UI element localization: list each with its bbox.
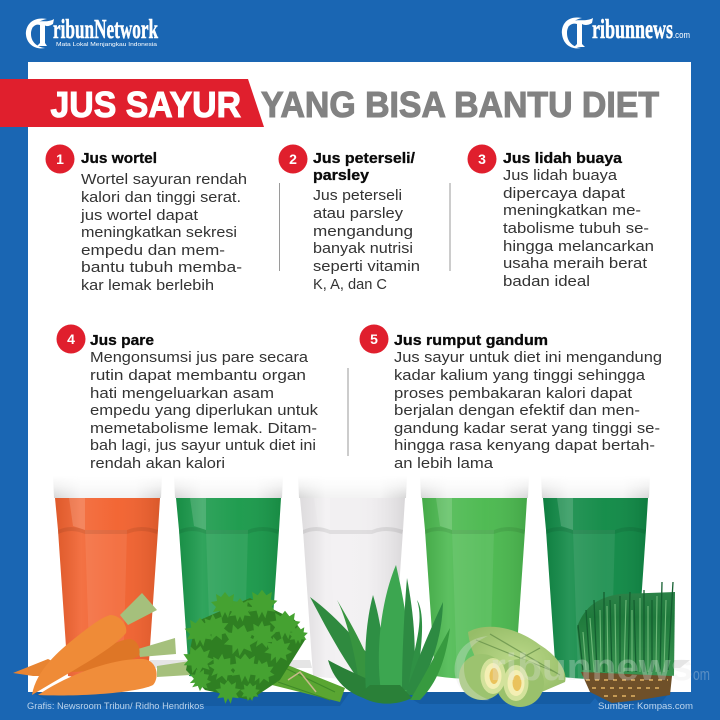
shelf shadow — [150, 660, 690, 668]
icon: aloe vera — [310, 565, 450, 704]
item 2: jus peterseli: Jus peterseli/ — [313, 150, 416, 167]
item 2: jus peterseli — [278, 144, 420, 293]
item 1: jus wortel: jus wortel dapat — [80, 207, 199, 224]
item 1: jus wortel: bantu tubuh memba- — [81, 259, 242, 276]
logo: Tribunnews.com — [562, 14, 690, 48]
title banner: JUS SAYUR — [50, 84, 241, 125]
item 5: jus rumput gandum — [360, 324, 662, 472]
item 2: jus peterseli: Jus peterseli — [313, 187, 402, 204]
item 4: jus pare: Jus pare — [90, 332, 154, 349]
icon: wheatgrass — [577, 582, 675, 703]
title banner — [0, 79, 659, 127]
item 5: jus rumput gandum: kadar kalium yang tinggi sehingga — [394, 367, 646, 384]
glass: bitter gourd juice — [420, 476, 529, 679]
item 2: jus peterseli: K, A, dan C — [313, 276, 387, 293]
icon: parsley — [180, 590, 345, 704]
glass: parsley juice — [174, 476, 283, 679]
logo: Tribun Network — [26, 14, 158, 48]
item 4: jus pare: hati mengeluarkan asam — [90, 385, 274, 402]
credit: source: Sumber: Kompas.com — [598, 701, 693, 712]
item 2: jus peterseli: mengandung — [313, 223, 413, 240]
glass: wheatgrass juice — [541, 476, 650, 679]
watermark — [455, 636, 710, 700]
item 3: jus lidah buaya — [468, 144, 654, 290]
item 3: jus lidah buaya: meningkatkan me- — [503, 202, 641, 219]
item 4: jus pare: empedu yang diperlukan untuk — [90, 402, 319, 419]
logo: Tribun Network: Mata Lokal Menjangkau Indonesia — [56, 42, 158, 48]
item 5: jus rumput gandum: gandung kadar serat yang tinggi se- — [394, 420, 660, 437]
item 1: jus wortel: Wortel sayuran rendah — [81, 171, 247, 188]
watermark: om — [693, 665, 710, 684]
item 3: jus lidah buaya: badan ideal — [503, 273, 590, 290]
item 3: jus lidah buaya: hingga melancarkan — [503, 238, 654, 255]
item 4: jus pare: Mengonsumsi jus pare secara — [90, 349, 309, 366]
shadow under vegetables — [30, 692, 670, 706]
icon: carrots — [13, 593, 190, 695]
item 1: jus wortel: kar lemak berlebih — [81, 277, 214, 294]
item 4: jus pare: 4 — [67, 331, 75, 347]
item 1: jus wortel: 1 — [56, 151, 64, 167]
item 4: jus pare: memetabolisme lemak. Ditam- — [90, 420, 317, 437]
icon: bitter gourd — [459, 627, 566, 707]
item 1: jus wortel: meningkatkan sekresi — [81, 224, 237, 241]
item 5: jus rumput gandum: hingga rasa kenyang dapat bertah- — [394, 437, 655, 454]
item 4: jus pare — [56, 324, 319, 472]
item 5: jus rumput gandum: berjalan dengan efektif dan men- — [394, 402, 640, 419]
item 5: jus rumput gandum: 5 — [370, 331, 378, 347]
item 2: jus peterseli: banyak nutrisi — [313, 240, 413, 257]
item 3: jus lidah buaya: usaha meraih berat — [503, 255, 648, 272]
item 4: jus pare: bah lagi, jus sayur untuk diet ini — [90, 437, 316, 454]
item 2: jus peterseli: parsley — [313, 167, 370, 184]
glass: aloe juice — [298, 476, 407, 679]
item 2: jus peterseli: atau parsley — [313, 205, 404, 222]
item 5: jus rumput gandum: Jus rumput gandum — [394, 332, 548, 349]
item 5: jus rumput gandum: Jus sayur untuk diet ini mengandung — [394, 349, 662, 366]
item 1: jus wortel: Jus wortel — [81, 150, 157, 167]
item 1: jus wortel: kalori dan tinggi serat. — [81, 189, 241, 206]
item 5: jus rumput gandum: an lebih lama — [394, 455, 494, 472]
item 1: jus wortel — [46, 144, 247, 294]
title banner: YANG BISA BANTU DIET — [261, 84, 659, 125]
logo: Tribun Network: ribunNetwork — [53, 14, 158, 44]
item 3: jus lidah buaya: Jus lidah buaya — [503, 167, 618, 184]
logo: Tribunnews.com: ribunnews — [592, 14, 673, 44]
item 3: jus lidah buaya: 3 — [478, 151, 486, 167]
item 2: jus peterseli: 2 — [289, 151, 297, 167]
watermark: ribunnews — [490, 647, 693, 689]
logo: Tribunnews.com: .com — [673, 30, 690, 40]
item 2: jus peterseli: seperti vitamin — [313, 258, 420, 275]
item 4: jus pare: rutin dapat membantu organ — [90, 367, 306, 384]
credit: graphics: Grafis: Newsroom Tribun/ Ridho Hendrikos — [27, 701, 204, 712]
item 4: jus pare: rendah akan kalori — [90, 455, 225, 472]
item 5: jus rumput gandum: proses pembakaran kalori dapat — [394, 385, 633, 402]
glass: carrot juice — [53, 476, 162, 679]
item 3: jus lidah buaya: Jus lidah buaya — [503, 150, 623, 167]
item 3: jus lidah buaya: dipercaya dapat — [503, 185, 626, 202]
item 3: jus lidah buaya: tabolisme tubuh se- — [503, 220, 649, 237]
item 1: jus wortel: empedu dan mem- — [81, 242, 225, 259]
